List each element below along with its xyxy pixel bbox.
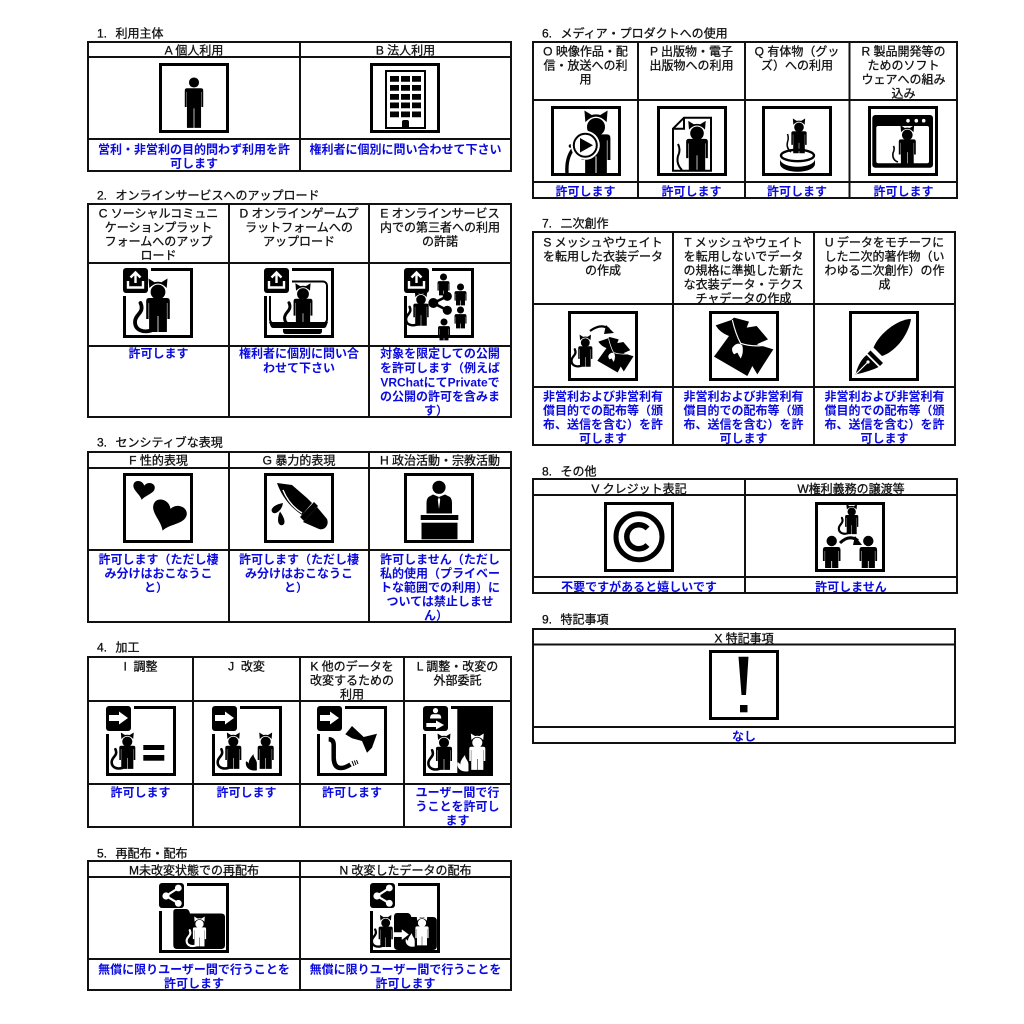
heading: 9: 特記事項 bbox=[560, 612, 609, 626]
permission: H: ん） bbox=[424, 608, 448, 622]
permission: U: 可します bbox=[860, 432, 909, 446]
column header: O: O 映像作品・配 bbox=[543, 44, 628, 58]
column header: D: アップロード bbox=[263, 234, 335, 248]
column header: C: ロード bbox=[140, 248, 177, 262]
heading: 6: メディア・プロダクトへの使用 bbox=[560, 26, 728, 40]
permission: A: 営利・非営利の目的問わず利用を許 bbox=[98, 142, 290, 156]
icon: use for modifying other data bbox=[317, 706, 386, 774]
permission: T: 償目的での配布等（頒 bbox=[683, 402, 804, 418]
permission: W: 許可しません bbox=[815, 579, 887, 594]
heading: 5: 5. bbox=[97, 846, 107, 860]
column header: C: C ソーシャルコミュニ bbox=[99, 206, 218, 220]
column header: Q: Q 有体物（グッ bbox=[755, 44, 839, 58]
column header: K: 改変するための bbox=[310, 672, 394, 688]
permission: C: 許可します bbox=[128, 346, 189, 360]
icon: figure on base bbox=[764, 108, 830, 174]
permission: X: なし bbox=[732, 730, 756, 744]
column header: T: チャデータの作成 bbox=[696, 290, 791, 306]
permission: T: 非営利および非営利有 bbox=[683, 388, 804, 404]
permission: E: す） bbox=[424, 403, 448, 417]
permission: B: 権利者に個別に問い合わせて下さい bbox=[309, 142, 502, 156]
column header: F: F 性的表現 bbox=[129, 452, 188, 468]
column header: U: U データをモチーフに bbox=[825, 234, 944, 250]
icon: upload to social platform bbox=[123, 268, 192, 336]
column header: P: 出版物への利用 bbox=[649, 58, 734, 72]
permission: U: 非営利および非営利有 bbox=[824, 388, 945, 404]
permission: S: 可します bbox=[579, 432, 627, 446]
permission: S: 償目的での配布等（頒 bbox=[543, 402, 663, 418]
panel: 8 その他 bbox=[533, 464, 957, 594]
column header: T: を転用しないでデータ bbox=[684, 248, 803, 264]
column header: T: T メッシュやウェイト bbox=[684, 236, 803, 250]
icon: publication document bbox=[658, 108, 726, 174]
column header: U: 成 bbox=[878, 278, 891, 292]
permission: L: ます bbox=[445, 814, 470, 828]
heading: 5: 再配布・配布 bbox=[116, 846, 188, 860]
heading: 7: 7. bbox=[542, 216, 552, 230]
icon: upload to game platform bbox=[264, 268, 332, 336]
icon: copyright bbox=[606, 504, 672, 570]
icon: distribution of modified data bbox=[370, 883, 438, 952]
icon: person bbox=[160, 64, 228, 132]
column header: T: の規格に準拠した新た bbox=[683, 262, 804, 278]
icon: costume conversion bbox=[570, 312, 636, 380]
column header: B: B 法人利用 bbox=[376, 44, 435, 58]
permission: S: 非営利および非営利有 bbox=[543, 388, 663, 404]
panel: 3 センシティブな表現 bbox=[88, 434, 511, 622]
panel: 5 再配布・配布 bbox=[88, 846, 511, 990]
icon: software window bbox=[870, 108, 936, 174]
icon: new costume bbox=[710, 312, 778, 380]
column header: H: H 政治活動・宗教活動 bbox=[380, 452, 500, 468]
heading: 7: 二次創作 bbox=[560, 216, 609, 230]
heading: 8: その他 bbox=[560, 464, 597, 478]
permission: D: わせて下さい bbox=[263, 361, 335, 375]
column header: K: 利用 bbox=[340, 688, 364, 702]
permission: E: 対象を限定しての公開 bbox=[380, 346, 500, 360]
permission: F: み分けはおこなうこ bbox=[104, 566, 213, 580]
permission: A: 可します bbox=[170, 156, 218, 170]
panel: 9 特記事項 bbox=[533, 612, 955, 744]
permission: F: 許可します（ただし棲 bbox=[98, 552, 219, 566]
column header: E: 内での第三者への利用 bbox=[380, 220, 500, 234]
panel: 2 オンラインサービスへのアップロード bbox=[88, 188, 511, 417]
icon: modification bbox=[212, 706, 280, 774]
icon: fountain pen bbox=[850, 312, 918, 380]
icon: knife with blood drops bbox=[266, 474, 332, 542]
permission: U: 布、送信を含む）を許 bbox=[824, 416, 945, 432]
permission: D: 権利者に個別に問い合 bbox=[239, 346, 359, 360]
column header: O: 信・放送への利 bbox=[543, 58, 628, 72]
column header: R: R 製品開発等の bbox=[861, 44, 946, 58]
column header: X: X 特記事項 bbox=[714, 630, 774, 646]
permission: T: 布、送信を含む）を許 bbox=[683, 416, 804, 432]
column header: I: I 調整 bbox=[123, 660, 158, 674]
heading: 4: 4. bbox=[97, 640, 107, 654]
permission: H: 私的使用（プライベー bbox=[380, 566, 500, 580]
column header: W: W権利義務の譲渡等 bbox=[797, 481, 905, 496]
permission: N: 許可します bbox=[375, 976, 436, 990]
heading: 8: 8. bbox=[542, 464, 552, 478]
permission: T: 可します bbox=[719, 432, 768, 446]
column header: C: ケーションプラット bbox=[105, 220, 212, 234]
heading: 2: 2. bbox=[97, 188, 107, 202]
permission: H: ついては禁止しませ bbox=[386, 594, 494, 608]
panel: 7 二次創作 bbox=[533, 216, 955, 446]
permission: G: み分けはおこなうこ bbox=[245, 566, 353, 580]
column header: C: フォームへのアップ bbox=[105, 234, 212, 248]
permission: L: ユーザー間で行 bbox=[416, 784, 499, 800]
permission: V: 不要ですがあると嬉しいです bbox=[561, 579, 717, 594]
column header: S: S メッシュやウェイト bbox=[543, 236, 663, 250]
column header: P: P 出版物・電子 bbox=[650, 44, 733, 58]
column header: T: な衣装データ・テクス bbox=[684, 276, 803, 292]
heading: 6: 6. bbox=[542, 26, 552, 40]
column header: L: L 調整・改変の bbox=[417, 658, 498, 674]
icon: hearts bbox=[124, 474, 192, 542]
icon: sharing with third parties bbox=[404, 268, 472, 340]
permission: H: 許可しません（ただし bbox=[380, 552, 500, 566]
heading: 1: 利用主体 bbox=[116, 26, 164, 40]
column header: S: の作成 bbox=[585, 264, 621, 278]
column header: L: 外部委託 bbox=[433, 674, 482, 688]
column header: D: ラットフォームへの bbox=[245, 220, 353, 234]
permission: E: の公開の許可を含みま bbox=[380, 388, 500, 403]
column header: R: ウェアへの組み bbox=[861, 72, 946, 86]
icon: video play bbox=[552, 108, 620, 176]
column header: V: V クレジット表記 bbox=[591, 482, 687, 496]
heading: 4: 加工 bbox=[116, 640, 140, 654]
icon: exclamation bbox=[710, 652, 778, 718]
icon: redistribution unmodified bbox=[159, 883, 228, 952]
panel: 6 メディア・プロダクトへの使用 bbox=[533, 26, 957, 198]
permission: G: 許可します（ただし棲 bbox=[239, 552, 359, 566]
heading: 3: 3. bbox=[97, 436, 107, 450]
column header: Q: ズ）への利用 bbox=[761, 58, 833, 72]
heading: 9: 9. bbox=[542, 612, 552, 626]
permission: O: 許可します bbox=[555, 184, 616, 198]
column header: G: G 暴力的表現 bbox=[263, 452, 335, 468]
permission: Q: 許可します bbox=[767, 184, 827, 198]
permission: M: 許可します bbox=[164, 976, 224, 990]
heading: 2: オンラインサービスへのアップロード bbox=[116, 188, 320, 202]
permission: R: 許可します bbox=[873, 184, 934, 198]
column header: A: A 個人利用 bbox=[165, 44, 223, 58]
column header: E: の許諾 bbox=[422, 234, 458, 248]
panel: 1 利用主体 bbox=[88, 26, 511, 171]
permission: S: 布、送信を含む）を許 bbox=[543, 416, 663, 432]
icon: speaker at podium bbox=[406, 474, 472, 542]
permission: I: 許可します bbox=[110, 784, 171, 800]
column header: K: K 他のデータを bbox=[310, 658, 394, 674]
column header: S: を転用した衣装データ bbox=[543, 248, 663, 264]
permission: F: と） bbox=[144, 580, 168, 594]
column header: U: した二次的著作物（い bbox=[824, 248, 945, 264]
permission: U: 償目的での配布等（頒 bbox=[824, 402, 945, 418]
permission: M: 無償に限りユーザー間で行うことを bbox=[98, 962, 290, 976]
column header: J: J 改変 bbox=[228, 658, 265, 674]
icon: adjust equals bbox=[106, 706, 174, 774]
permission: P: 許可します bbox=[661, 184, 722, 198]
permission: G: と） bbox=[284, 580, 308, 594]
permission: N: 無償に限りユーザー間で行うことを bbox=[310, 962, 501, 976]
column header: E: E オンラインサービス bbox=[380, 206, 500, 220]
icon: office building bbox=[372, 64, 438, 132]
panel: 4 加工 bbox=[88, 640, 511, 828]
column header: D: D オンラインゲームプ bbox=[240, 206, 358, 220]
column header: U: わゆる二次創作）の作 bbox=[824, 264, 945, 278]
column header: R: 込み bbox=[891, 86, 916, 100]
icon: rights transfer bbox=[816, 504, 884, 570]
permission: H: トな範囲での利用）に bbox=[380, 580, 500, 594]
column header: R: ためのソフト bbox=[867, 58, 940, 72]
icon: outsourcing bbox=[423, 706, 492, 775]
permission: E: を許可します（例えば bbox=[380, 360, 500, 375]
permission: K: 許可します bbox=[322, 784, 382, 800]
column header: O: 用 bbox=[579, 72, 592, 86]
permission: L: うことを許可し bbox=[415, 798, 500, 814]
heading: 3: センシティブな表現 bbox=[116, 434, 223, 450]
column header: M: M未改変状態での再配布 bbox=[129, 862, 259, 878]
permission: J: 許可します bbox=[216, 784, 277, 800]
permission: E: VRChatにてPrivateで bbox=[380, 375, 500, 389]
heading: 1: 1. bbox=[97, 26, 107, 40]
column header: N: N 改変したデータの配布 bbox=[339, 862, 472, 878]
